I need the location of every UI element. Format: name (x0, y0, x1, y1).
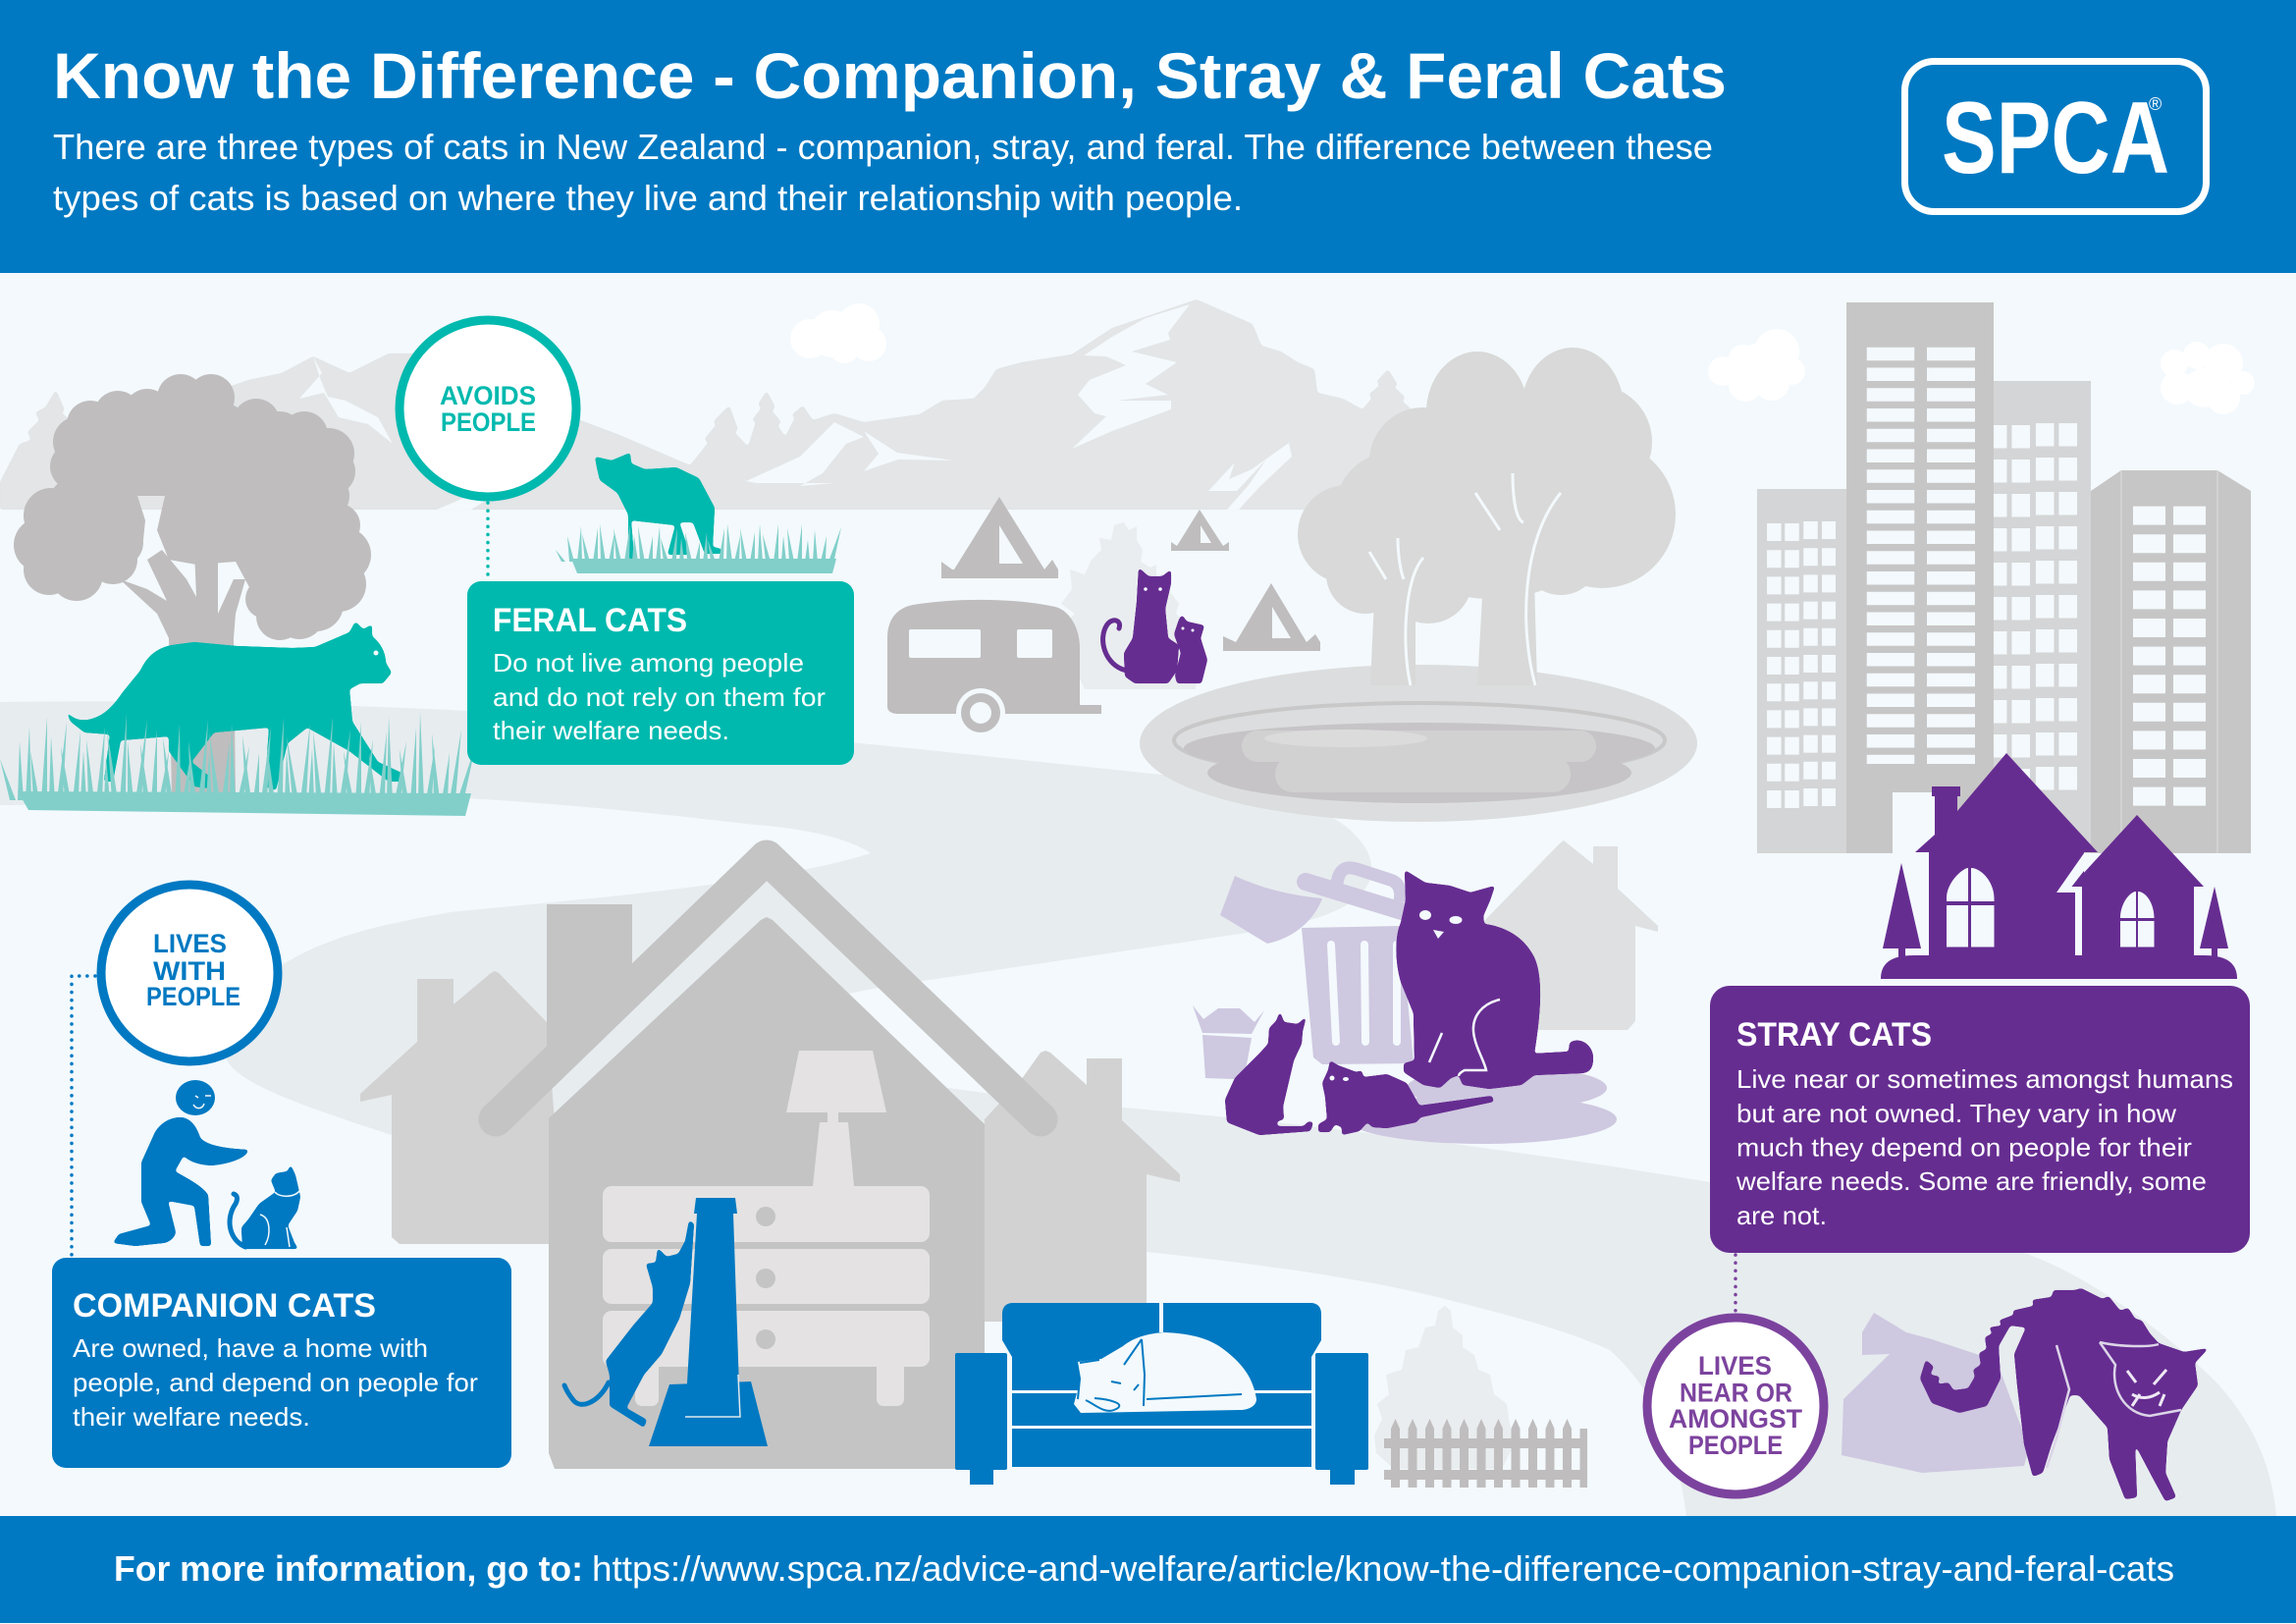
badge: lives with people: WITH (153, 956, 226, 986)
subtitle: types of cats is based on where they live and their relationship with people. (53, 178, 1243, 218)
icon: cat climbing post (564, 1220, 694, 1428)
icon: main house (496, 857, 1041, 1469)
logo: SPCA: SPCA (1942, 81, 2169, 195)
icon: faint pine behind campsite cats (1061, 522, 1197, 689)
text: feral description: and do not rely on them for (493, 682, 826, 712)
icon: pond island (1140, 665, 1697, 822)
icon: shadow under stray cats (1348, 1066, 1617, 1144)
cloud: right of city (2161, 342, 2255, 414)
logo: SPCA: ® (2149, 94, 2162, 114)
text: stray description (1735, 1064, 2233, 1230)
icon: faint pine behind fence (1374, 1306, 1515, 1469)
badge: lives near or amongst people: PEOPLE (1688, 1431, 1783, 1460)
subtitle (53, 127, 1713, 218)
icon: scratching post (649, 1198, 768, 1446)
badge: lives near or amongst people (1647, 1318, 1824, 1494)
text: feral description: Do not live among people (493, 648, 804, 677)
icon: person kneeling (113, 1080, 248, 1246)
icon: caravan (887, 600, 1101, 737)
badge: avoids people: AVOIDS (440, 381, 536, 410)
badge: lives near or amongst people: LIVES (1698, 1351, 1772, 1380)
text: feral description (493, 648, 826, 745)
text: stray description: but are not owned. They vary in how (1736, 1099, 2176, 1128)
icon: tent right (1223, 583, 1320, 651)
icon: blue sofa (955, 1303, 1368, 1485)
icon: rubbish bin (1302, 868, 1414, 1064)
icon: picket fence (1384, 1419, 1587, 1480)
city buildings (1757, 302, 2251, 853)
icon: companion cat sitting (230, 1164, 300, 1249)
badge: lives with people: PEOPLE (146, 982, 240, 1011)
connector: avoids people to feral panel (486, 503, 490, 581)
badge: lives near or amongst people: AMONGST (1669, 1404, 1802, 1434)
text: companion description: Are owned, have a home with (73, 1333, 428, 1363)
text: companion description (73, 1333, 478, 1432)
text: stray description: welfare needs. Some are friendly, some (1735, 1166, 2207, 1196)
icon: sleeping white cat (1074, 1332, 1256, 1413)
tree: large grey tree at left (14, 374, 371, 797)
icon: chest of drawers (603, 1186, 930, 1406)
icon: rubbish bag (1842, 1313, 2029, 1473)
text: companion description: people, and depend on people for (73, 1368, 478, 1397)
icon: feral cat eye (373, 650, 379, 656)
logo: SPCA (1904, 61, 2207, 212)
cloud: left of city (1708, 329, 1805, 402)
panel: feral cats (467, 581, 854, 765)
grass: large tuft under feral cat (0, 712, 476, 816)
distant grey house behind bin (1472, 840, 1658, 1030)
tree: pair of pale trees on island (1298, 348, 1676, 685)
badge: lives with people (101, 885, 278, 1061)
text: companion description: their welfare needs. (73, 1402, 310, 1432)
road: winding S-curve path (0, 701, 2276, 1516)
badge: lives near or amongst people: NEAR OR (1680, 1379, 1792, 1408)
footer band (0, 1516, 2296, 1623)
connector: stray panel to lives near badge (1734, 1255, 1737, 1314)
icon: small sitting stray cat (1225, 1011, 1313, 1135)
footer text: For more information, go to: (114, 1548, 583, 1589)
heading: feral cats: FERAL CATS (493, 602, 687, 639)
text: stray description: much they depend on people for their (1736, 1133, 2192, 1163)
grass: small tuft under feral cat (556, 524, 841, 573)
icon: left side house (360, 971, 564, 1244)
panel: stray cats (1710, 986, 2250, 1253)
title: Know the Difference - Companion, Stray & Feral Cats (53, 39, 1727, 112)
icon: tent top (1171, 510, 1229, 551)
icon: paper bag (1220, 876, 1322, 944)
heading: companion cats: COMPANION CATS (73, 1287, 376, 1325)
header band (0, 0, 2296, 273)
icon: purple campsite cats (1103, 568, 1207, 683)
icon: lying stray kitten (1318, 1060, 1494, 1135)
icon: right side house (985, 1051, 1180, 1322)
icon: feral cat walking (63, 622, 401, 790)
connector: lives with people to companion panel (72, 976, 95, 1258)
badge: avoids people: PEOPLE (441, 407, 536, 437)
icon: feral cat on grass (595, 453, 721, 559)
mountains (0, 299, 1414, 510)
icon: takeaway box (1193, 1005, 1264, 1079)
text: feral description: their welfare needs. (493, 716, 729, 745)
heading: stray cats: STRAY CATS (1736, 1016, 1932, 1054)
cloud: centre (790, 303, 886, 363)
icon: purple houses and trees (1881, 753, 2237, 979)
badge: lives with people: LIVES (153, 929, 227, 958)
icon: lamp (786, 1051, 886, 1186)
icon: tent left (941, 497, 1058, 578)
icon: large stray cat by bin (1396, 870, 1593, 1089)
text: stray description: Live near or sometimes amongst humans (1736, 1064, 2233, 1094)
footer link: https://www.spca.nz/advice-and-welfare/article/know-the-difference-companion-stray-and-feral-cats (592, 1548, 2174, 1589)
badge: avoids people (400, 320, 576, 497)
panel: companion cats (52, 1258, 511, 1468)
icon: angry stray cat (1920, 1288, 2209, 1501)
text: stray description: are not. (1736, 1201, 1827, 1230)
subtitle: There are three types of cats in New Zealand - companion, stray, and feral. The difference between these (53, 127, 1713, 167)
